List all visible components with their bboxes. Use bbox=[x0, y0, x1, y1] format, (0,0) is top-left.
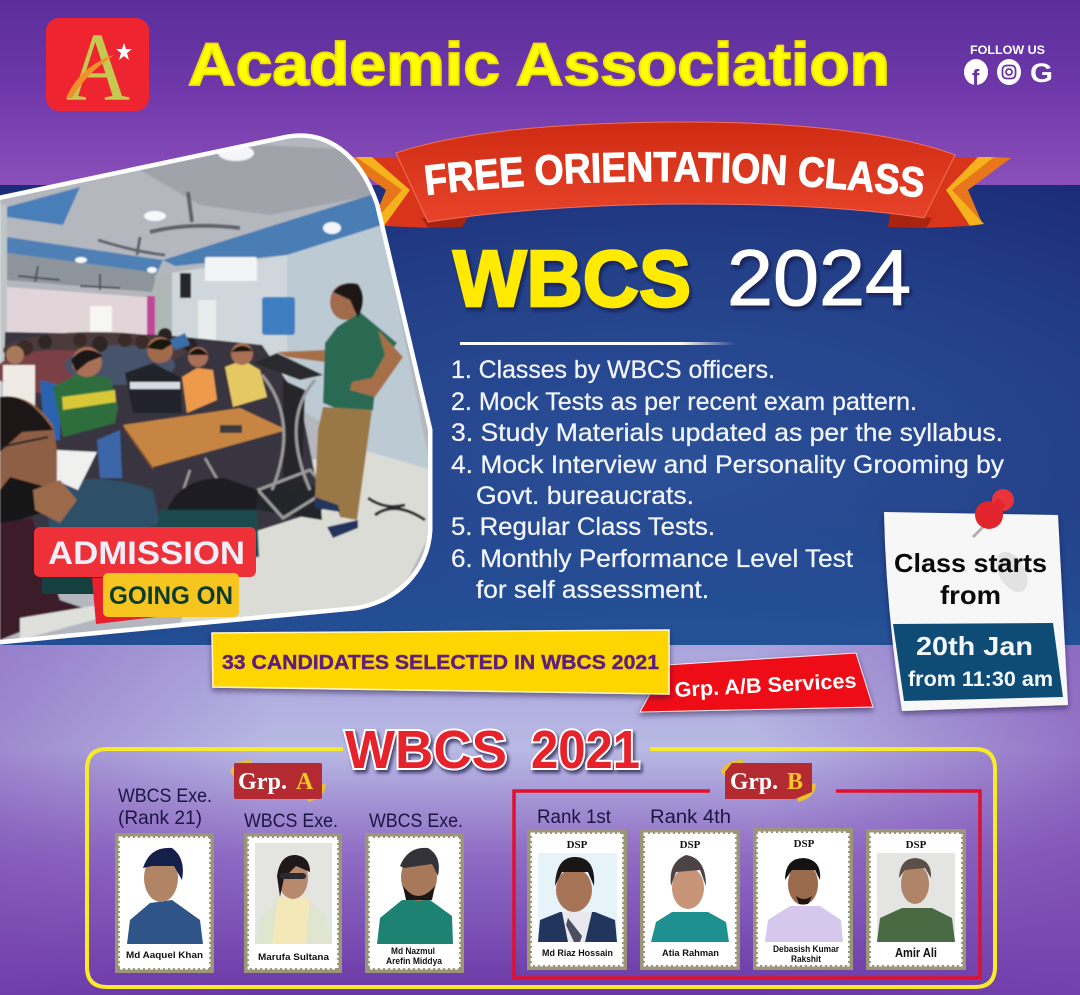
benefits list: 1. Classes by WBCS officers. bbox=[451, 356, 775, 384]
follow us: G bbox=[1030, 58, 1053, 88]
admission going on badge: GOING ON bbox=[109, 582, 233, 610]
classroom photo bbox=[0, 130, 440, 650]
wbcs 2024 heading: 2024 bbox=[727, 233, 911, 322]
benefits list: for self assessment. bbox=[476, 576, 709, 604]
class starts sticky note bbox=[884, 489, 1068, 711]
benefits list: 5. Regular Class Tests. bbox=[451, 513, 715, 541]
card: Md Nazmul Arefin Middya bbox=[365, 833, 464, 973]
class starts sticky note: 20th Jan bbox=[916, 631, 1033, 661]
selected candidates banner: Grp. A/B Services bbox=[674, 669, 857, 702]
card labels: WBCS Exe. bbox=[118, 786, 212, 807]
group a badge bbox=[230, 760, 326, 802]
follow us bbox=[964, 43, 1053, 90]
card: Md Riaz Hossain bbox=[527, 829, 627, 970]
benefits list: 2. Mock Tests as per recent exam pattern. bbox=[451, 388, 917, 416]
group a badge: Grp. bbox=[238, 769, 287, 795]
card: Md Nazmul Arefin Middya: Md Nazmul bbox=[391, 946, 435, 957]
card labels: (Rank 21) bbox=[118, 808, 202, 829]
wbcs 2024 heading: WBCS bbox=[453, 234, 691, 323]
admission going on badge bbox=[34, 527, 256, 624]
card labels bbox=[118, 786, 731, 832]
card: Md Aaquel Khan bbox=[115, 833, 214, 973]
yellow frame bbox=[87, 749, 995, 987]
card: Debasish Kumar Rakshit: DSP bbox=[794, 838, 815, 850]
card: Debasish Kumar Rakshit bbox=[753, 828, 853, 970]
card: Debasish Kumar Rakshit: Debasish Kumar bbox=[773, 944, 839, 955]
card: Atia Rahman: Atia Rahman bbox=[662, 948, 719, 959]
group a badge: A bbox=[296, 769, 314, 795]
card: Atia Rahman: DSP bbox=[680, 839, 701, 851]
follow us: FOLLOW US bbox=[970, 43, 1045, 57]
card labels: WBCS Exe. bbox=[369, 811, 463, 832]
card labels: Rank 1st bbox=[537, 807, 612, 828]
logo bbox=[46, 14, 149, 122]
benefits list: 6. Monthly Performance Level Test bbox=[451, 545, 853, 573]
wbcs 2021 heading bbox=[345, 720, 640, 780]
card: Atia Rahman bbox=[640, 829, 740, 970]
wbcs 2021 heading: WBCS bbox=[345, 720, 507, 780]
card: Amir Ali: DSP bbox=[906, 839, 927, 851]
card: Marufa Sultana: Marufa Sultana bbox=[258, 952, 330, 963]
wbcs 2021 heading: 2021 bbox=[531, 720, 640, 780]
selected candidates banner: 33 CANDIDATES SELECTED IN WBCS 2021 bbox=[222, 652, 659, 674]
card labels: WBCS Exe. bbox=[244, 811, 338, 832]
follow us: f bbox=[972, 65, 980, 90]
benefits list: 3. Study Materials updated as per the syllabus. bbox=[451, 419, 1003, 447]
logo: A bbox=[66, 14, 130, 122]
card: Md Riaz Hossain: DSP bbox=[567, 839, 588, 851]
card: Marufa Sultana bbox=[244, 833, 342, 973]
card: Md Riaz Hossain: Md Riaz Hossain bbox=[542, 948, 613, 959]
ribbon banner: FREE ORIENTATION CLASS bbox=[424, 152, 924, 198]
benefits list bbox=[451, 356, 1005, 604]
benefits list: Govt. bureaucrats. bbox=[476, 482, 694, 510]
group b badge: Grp. bbox=[730, 769, 778, 795]
class starts sticky note: Class starts bbox=[894, 548, 1047, 578]
selected candidates banner bbox=[212, 630, 873, 712]
card: Amir Ali bbox=[866, 829, 966, 970]
class starts sticky note: from 11:30 am bbox=[908, 668, 1053, 691]
admission going on badge: ADMISSION bbox=[48, 535, 245, 571]
red frame bbox=[514, 791, 980, 978]
card labels: Rank 4th bbox=[650, 807, 731, 828]
card: Md Nazmul Arefin Middya: Arefin Middya bbox=[386, 956, 443, 967]
ribbon banner bbox=[353, 122, 1011, 228]
group b badge: B bbox=[787, 769, 803, 795]
wbcs 2024 heading bbox=[453, 233, 911, 323]
card: Debasish Kumar Rakshit: Rakshit bbox=[791, 954, 822, 965]
benefits list: 4. Mock Interview and Personality Grooming by bbox=[451, 451, 1005, 479]
title: Academic Association bbox=[188, 31, 890, 98]
card: Md Aaquel Khan: Md Aaquel Khan bbox=[126, 950, 203, 961]
card: Amir Ali: Amir Ali bbox=[895, 945, 937, 960]
class starts sticky note: from bbox=[940, 580, 1001, 610]
group b badge bbox=[721, 760, 816, 802]
